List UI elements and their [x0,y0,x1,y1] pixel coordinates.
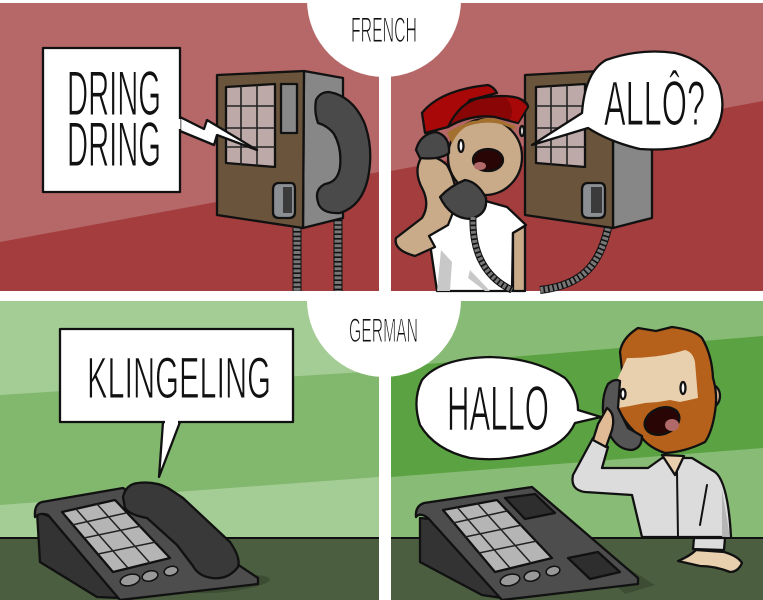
lower arm cuff [693,538,725,550]
shirt [428,200,526,291]
callout: HALLO: HALLO [447,374,549,444]
head [448,119,522,195]
icon: wall phone [217,71,370,228]
sweat drops [458,140,464,152]
face [618,350,698,408]
badge: GERMAN [307,300,461,377]
arm [396,157,456,256]
hair and beard [618,327,716,453]
badge: GERMAN: GERMAN [349,312,418,350]
callout: ALLÔ? [532,52,722,150]
badge: FRENCH [307,0,461,77]
character: bearded man [572,327,742,572]
badge: FRENCH: FRENCH [351,11,417,50]
coiled cord [473,217,512,290]
handset [603,380,642,450]
panel: French ringing wall phone [0,3,379,291]
handset mouthpiece [440,180,486,219]
panel: French answering man [391,3,763,291]
icon: wall phone second panel [525,71,652,290]
sweat drops [680,382,686,394]
icon: wall phone cords [297,212,338,291]
icon: desk phone second panel [416,487,655,600]
lower hand [678,550,742,572]
handset earpiece [416,132,449,158]
cap [422,85,497,133]
icon: desk phone [35,483,271,600]
ear [700,384,720,408]
mouth [473,149,503,171]
callout: DRING DRING: DRING [67,110,161,180]
callout: DRING DRING [43,48,257,192]
callout: HALLO [416,357,601,459]
callout: DRING DRING: DRING [67,59,161,129]
shirt [572,438,731,537]
mouth [640,402,684,440]
text: DRING DRING [67,59,161,180]
panel: German ringing desk phone [0,301,379,600]
hand [593,408,613,447]
text: KLINGELING: KLINGELING [87,346,271,411]
character: boy in red cap [396,85,528,291]
callout: KLINGELING [60,329,293,477]
panel: German answering man [391,301,763,600]
neck [662,455,684,475]
